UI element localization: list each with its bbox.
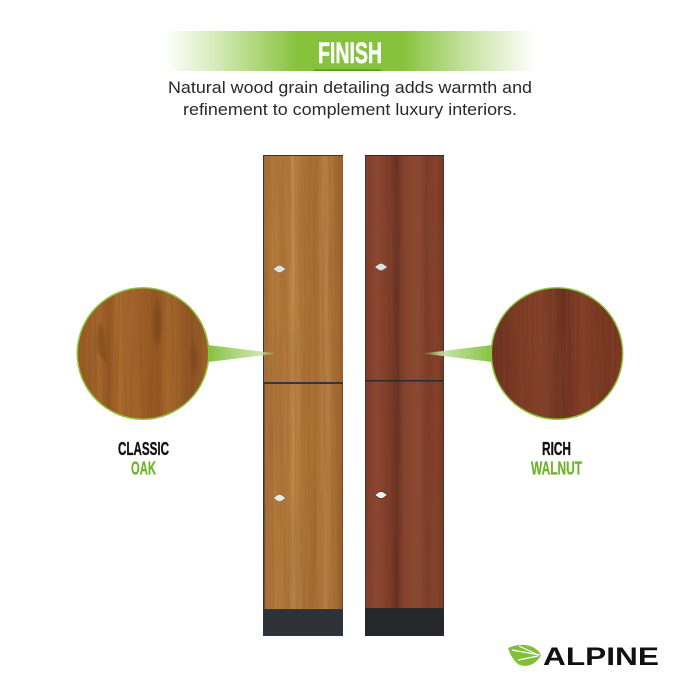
header band: FINISH: FINISH: [318, 37, 382, 70]
label: classic oak: [118, 438, 169, 478]
label: classic oak: OAK: [131, 458, 156, 478]
description text: [168, 79, 532, 119]
walnut base: [365, 609, 444, 635]
header band: FINISH: [165, 31, 535, 71]
oak base: [264, 610, 342, 635]
walnut upper handle: [374, 264, 388, 270]
oak lower handle: [273, 494, 286, 502]
label: rich walnut: [531, 438, 582, 478]
pointer: oak swatch to locker: [208, 345, 278, 362]
logo: Alpine: [508, 643, 659, 671]
icon: leaf: [508, 645, 541, 666]
oak upper door: [264, 156, 343, 382]
oak lower door: [264, 384, 342, 609]
walnut upper door: [366, 156, 444, 380]
logo: Alpine: ALPINE: [543, 643, 659, 671]
oak upper handle: [273, 266, 286, 272]
walnut lower handle: [374, 492, 388, 498]
oak locker: [263, 155, 343, 636]
description text: Natural wood grain detailing adds warmth and: [168, 79, 532, 97]
pointer: walnut swatch to locker: [422, 345, 492, 362]
label: rich walnut: RICH: [542, 438, 571, 459]
label: classic oak: CLASSIC: [118, 438, 169, 459]
walnut lower door: [366, 382, 444, 608]
description text: refinement to complement luxury interiors.: [183, 101, 517, 119]
walnut locker: [365, 155, 444, 636]
oak swatch circle: [76, 287, 210, 420]
walnut swatch circle: [490, 287, 624, 420]
label: rich walnut: WALNUT: [531, 458, 582, 478]
